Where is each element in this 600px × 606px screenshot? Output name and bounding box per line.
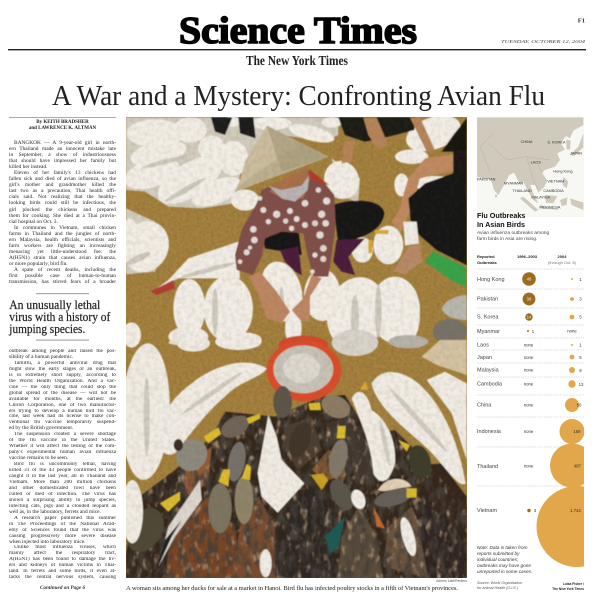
- bubble chart table: none: [567, 328, 577, 334]
- map labels: LAOS: [531, 161, 541, 165]
- map labels: [477, 140, 582, 210]
- bubble chart table: 9: [579, 368, 582, 373]
- dark mallard ducks: [119, 390, 468, 580]
- rows: S. Korea: [477, 314, 499, 320]
- article text: opening: [9, 140, 116, 285]
- rows: Vietnam: [477, 508, 497, 514]
- bubble chart table: 3: [534, 508, 537, 513]
- bubble chart table: none: [524, 464, 534, 468]
- pans and bowl: [442, 295, 467, 320]
- photo caption: A woman sits among her ducks for sale at a market in Hanoi. Bird flu has infected poultry stocks in a fifth of Vietnam's provinces.: [126, 585, 458, 592]
- map labels: MYANMAR: [504, 182, 524, 186]
- byline: and LAWRENCE K. ALTMAN: [29, 126, 96, 131]
- article text: opening: ern Thailand made an innocent mistake late: [9, 146, 116, 152]
- rows: Myanmar: [477, 329, 500, 335]
- graphic heading: Flu Outbreaks: [477, 211, 525, 220]
- byline: [29, 120, 96, 131]
- pull quote: An unusually lethal: [9, 297, 101, 312]
- article text: continuation: sibility of a human pandemic.: [9, 354, 73, 360]
- table header: Reported: [477, 254, 495, 259]
- woman's blouse: [235, 170, 336, 277]
- note: outbreaks may have gone: [477, 563, 531, 568]
- bubble chart table: 38: [527, 296, 532, 302]
- bubble chart table: none: [524, 382, 534, 386]
- bubble chart table: none: [524, 355, 534, 360]
- note: individual countries;: [477, 557, 518, 562]
- article text: opening: A(H5N1) strain that causes avian influenza,: [9, 255, 116, 261]
- bubble chart table: none: [524, 429, 534, 434]
- article text: opening: looking birds could still be infectious, the: [9, 200, 116, 206]
- bubble chart table: 14: [527, 314, 532, 320]
- graphic subheading: farm birds in Asia are rising.: [477, 237, 537, 242]
- article text: continuation: [9, 349, 116, 580]
- rows: Laos: [477, 342, 489, 348]
- crate: [422, 340, 467, 375]
- panel: article column: [8, 117, 116, 591]
- land: [477, 117, 583, 203]
- upper photo: [114, 109, 467, 356]
- bubble chart table: 1: [579, 342, 582, 348]
- article text: opening: cial hospital on Oct. 3.: [9, 219, 58, 225]
- rows: Thailand: [477, 464, 498, 470]
- bubble chart table: 5: [579, 355, 582, 360]
- page number: F1: [578, 18, 585, 24]
- table header: [477, 254, 576, 265]
- source: Source: World Organisation: [477, 581, 522, 585]
- article text: opening: Eleven of her family's 13 chickens had: [14, 170, 116, 176]
- woman's trousers and boots: [262, 201, 384, 255]
- article text: opening: that should have impressed her family but: [9, 158, 116, 164]
- bubble chart table: 169: [573, 429, 581, 434]
- map labels: THAILAND: [513, 189, 532, 193]
- article text: opening: transmission, has stirred fears of a broader: [9, 279, 116, 285]
- section title: Science Times: [179, 10, 417, 52]
- source: [477, 581, 522, 590]
- continuation note: Continued on Page 6: [40, 585, 85, 591]
- article text: opening: menacing yet little-understood foe: the: [9, 249, 116, 255]
- article text: opening: fallen sick and died of avian influenza, so the: [9, 176, 116, 182]
- article text: opening: ern Malaysia, health officials, scientists and: [9, 237, 116, 243]
- note: [477, 545, 532, 574]
- pull quote: virus with a history of: [9, 309, 111, 324]
- woman's face and mask: [270, 167, 310, 200]
- article text: opening: killed her instead.: [9, 164, 47, 170]
- newspaper nameplate: The New York Times: [246, 53, 348, 68]
- article text: opening: BANGKOK — A 9-year-old girl in north-: [14, 140, 116, 146]
- article text: opening: girl plucked the chickens and prepared: [9, 207, 116, 213]
- article text: opening: farms in Thailand and the jungles of north-: [9, 231, 116, 237]
- rows: Pakistan: [477, 296, 498, 302]
- article text: opening: last two as a precaution, Thai health offi-: [9, 188, 116, 194]
- source: for Animal Health (O.I.E.): [477, 586, 518, 590]
- table header: 1996–2003: [517, 254, 537, 259]
- rows: Malaysia: [477, 368, 500, 374]
- map labels: S. KOREA: [547, 140, 566, 144]
- bubble chart table: 1: [532, 329, 535, 334]
- article text: opening: girl's mother and grandmother killed the: [9, 182, 116, 188]
- bubble chart table: 5: [579, 314, 582, 320]
- table header: Outbreaks: [477, 260, 497, 265]
- article text: opening: first possible case of human-to-human: [9, 273, 116, 279]
- article text: continuation: vaccine remains to be seen.: [9, 455, 68, 461]
- article text: opening: In communes in Vietnam, small chicken: [14, 225, 116, 231]
- article text: opening: farm workers are fighting an increasingly: [9, 243, 116, 249]
- yellow bills: [160, 381, 417, 512]
- white ducks: [119, 333, 467, 577]
- graphic heading: [477, 211, 526, 229]
- bubble chart table: 487: [574, 464, 582, 468]
- byline: By KEITH BRADSHER: [36, 120, 89, 125]
- pull quote: jumping species.: [8, 321, 85, 336]
- article text: opening: A spate of recent deaths, including the: [14, 267, 116, 273]
- table header: 2004: [558, 254, 566, 259]
- rows: China: [477, 402, 492, 408]
- rows: Japan: [477, 355, 492, 361]
- article text: continuation: ed by the British government.: [9, 425, 73, 431]
- article text: opening: them for cooking. She died at a Thai provin-: [9, 213, 116, 219]
- bubble chart table: none: [524, 342, 534, 348]
- bubble chart table: none: [524, 368, 534, 372]
- photo: woman among ducks at Hanoi market: [126, 117, 574, 578]
- graphic credit: Luisa Fisher /: [563, 582, 584, 586]
- map labels: CHINA: [521, 140, 533, 144]
- note: reports submitted by: [477, 551, 519, 556]
- red basket of scraps: [267, 340, 341, 418]
- lower photo: [119, 329, 468, 580]
- graphic subheading: [477, 230, 549, 242]
- map labels: JAPAN: [570, 151, 582, 155]
- bubble chart table: 46: [527, 276, 532, 282]
- bubble chart table: 3: [579, 296, 582, 302]
- article text: continuation: when injected into laboratory mice.: [9, 538, 86, 544]
- rows: Indonesia: [477, 429, 502, 435]
- map labels: CAMBODIA: [543, 189, 564, 193]
- rows: Cambodia: [477, 382, 503, 388]
- map labels: INDONESIA: [539, 206, 561, 210]
- bubble chart table: 1: [579, 277, 582, 282]
- conical hat: [234, 126, 329, 192]
- table header: (through Oct. 8): [548, 260, 576, 265]
- bubble chart table: 50: [577, 402, 582, 408]
- rows: Hong Kong: [477, 277, 505, 283]
- shaded duck flock behind: [126, 117, 360, 274]
- photo credit: Adrees Latif/Reuters: [436, 578, 467, 582]
- bubble chart table: [477, 268, 584, 567]
- article text: continuation: well as, in the laboratory, ferrets and mice.: [9, 509, 101, 515]
- map labels: Hong Kong: [553, 169, 572, 173]
- map labels: PAKISTAN: [477, 177, 496, 181]
- pull quote: [8, 293, 111, 341]
- masthead: [8, 10, 586, 112]
- article text: opening: cials said. Not realizing that the healthy-: [9, 194, 116, 200]
- bubble chart table: 1,742: [570, 508, 581, 513]
- map of Asia: [477, 117, 584, 217]
- 1996-2003 bubbles: [522, 272, 536, 512]
- map labels: MALAYSIA: [531, 196, 551, 200]
- note: Note: Data is taken from: [477, 545, 528, 550]
- woman's hands: [249, 272, 322, 323]
- graphic credit: The New York Times: [552, 587, 584, 591]
- headline: A War and a Mystery: Confronting Avian Flu: [52, 80, 545, 112]
- row dividers: [477, 269, 584, 486]
- note: unreported in some cases.: [477, 569, 532, 574]
- bubble chart table: none: [524, 402, 534, 408]
- graphic subheading: Avian influenza outbreaks among: [477, 231, 549, 236]
- graphic credit: [552, 582, 584, 591]
- article text: opening: in September, a show of industriousness: [9, 152, 116, 158]
- bubble chart table: 13: [579, 382, 584, 387]
- date: TUESDAY, OCTOBER 12, 2004: [501, 39, 586, 45]
- rows: [477, 277, 505, 514]
- masthead rule: [8, 49, 586, 50]
- background legs and dark clothing: [211, 117, 467, 287]
- map labels: VIETNAM: [547, 180, 564, 184]
- graphic heading: In Asian Birds: [477, 220, 525, 229]
- article text: opening: or more popularly, bird flu.: [9, 261, 68, 267]
- 2004 bubbles: [536, 278, 584, 567]
